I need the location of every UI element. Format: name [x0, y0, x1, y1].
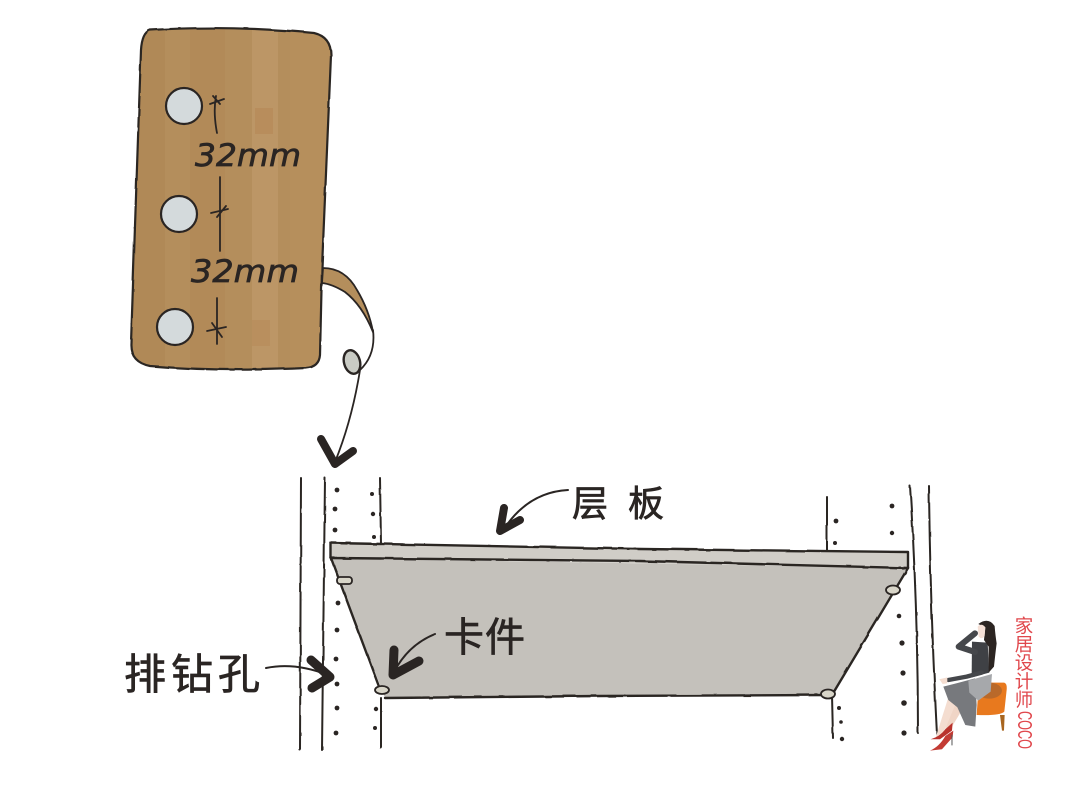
diagram: shelf pin drilling — [125, 26, 1032, 751]
board fill with wood grain — [132, 29, 330, 368]
drilled holes — [157, 88, 202, 345]
watermark: designer credit — [1011, 616, 1037, 749]
arrow: drill holes label — [266, 660, 330, 688]
shelf board — [331, 543, 908, 698]
panel: cabinet wall lines — [300, 478, 937, 750]
hair — [978, 621, 997, 673]
legs — [936, 690, 959, 739]
arms — [959, 633, 975, 652]
shelf pins — [337, 577, 900, 698]
face — [978, 625, 985, 638]
body — [972, 642, 989, 677]
stool — [977, 683, 1007, 715]
shelf underside — [331, 558, 908, 698]
panel: wood board sample — [125, 20, 340, 375]
credit chinese: 家居设计师 — [1011, 616, 1037, 708]
shelf outline — [331, 543, 908, 698]
arrow: shelf pin label — [393, 634, 435, 675]
skirt — [943, 678, 977, 727]
arrow: callout tab to wall holes — [321, 268, 373, 464]
shelf front edge — [331, 543, 908, 568]
label: shelf pin: 卡件 — [444, 616, 526, 660]
dimension lines — [207, 96, 228, 344]
drill hole dots — [333, 488, 907, 741]
dimension label: 32mm — [195, 138, 301, 174]
label: drill holes: 排钻孔 — [124, 651, 265, 698]
arrow: shelf label — [500, 490, 568, 531]
credit latin: COCO — [1013, 711, 1035, 749]
dimension label: 32mm — [191, 254, 299, 290]
board outline — [131, 28, 331, 370]
shoes — [930, 731, 953, 751]
icon: seated woman — [930, 621, 1007, 751]
label: shelf: 层板 — [572, 483, 684, 524]
